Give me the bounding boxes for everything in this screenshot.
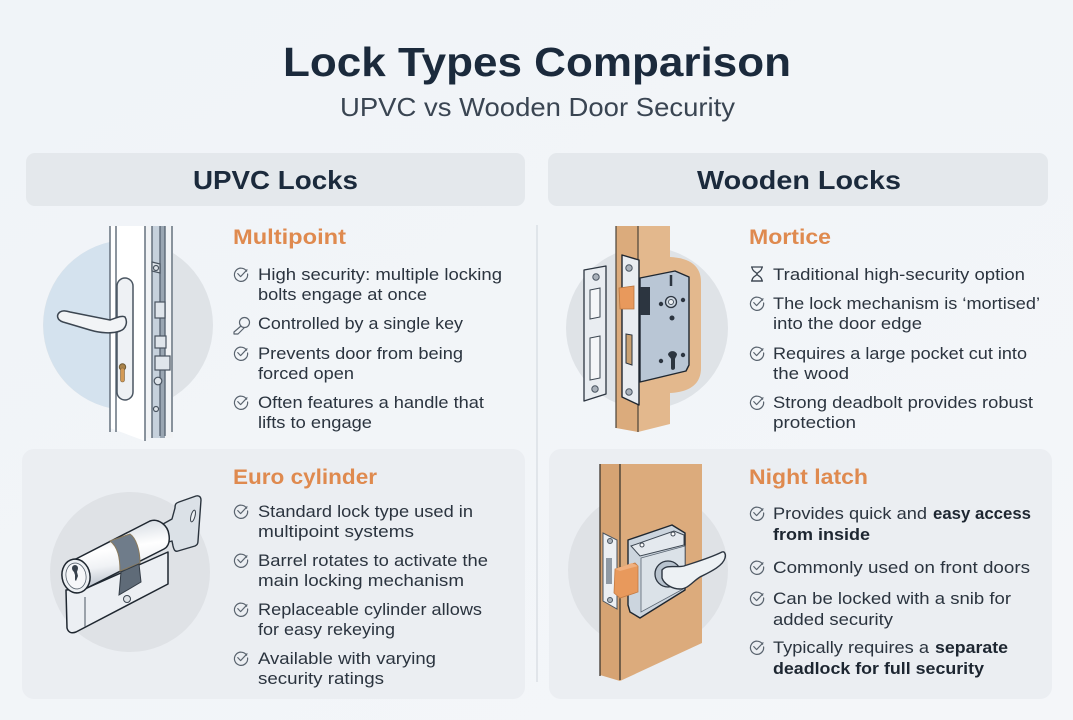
list: Night latch features: added security bbox=[773, 611, 894, 629]
illustration: night latch bbox=[568, 464, 728, 681]
list: Mortice features: Requires a large pocket cut into bbox=[773, 345, 1027, 363]
list: Multipoint features: Often features a handle that bbox=[258, 394, 484, 412]
heading: Multipoint: Multipoint bbox=[233, 226, 346, 249]
list: Night latch features: Provides quick and bbox=[773, 505, 927, 523]
list: Euro cylinder features bbox=[234, 503, 488, 688]
header: Wooden Locks: Wooden Locks bbox=[697, 165, 901, 195]
list: Night latch features: deadlock for full security bbox=[773, 660, 985, 678]
title: Lock Types Comparison bbox=[283, 39, 791, 85]
panel: Night latch bbox=[549, 449, 1052, 699]
list: Night latch features: Typically requires a bbox=[773, 639, 930, 657]
panel: Mortice bbox=[566, 226, 1040, 432]
list: Euro cylinder features: multipoint systems bbox=[258, 523, 414, 541]
list: Euro cylinder features: for easy rekeying bbox=[258, 621, 395, 639]
list: Multipoint features: bolts engage at once bbox=[258, 286, 427, 304]
heading: Night latch: Night latch bbox=[749, 466, 868, 489]
list: Euro cylinder features: Standard lock type used in bbox=[258, 503, 473, 521]
list: Mortice features: The lock mechanism is ‘mortised’ bbox=[773, 295, 1040, 313]
list: Euro cylinder features: Barrel rotates to activate the bbox=[258, 552, 488, 570]
list: Night latch features: separate bbox=[935, 639, 1008, 657]
heading: Euro cylinder: Euro cylinder bbox=[233, 466, 377, 489]
heading: Mortice: Mortice bbox=[749, 226, 831, 249]
list: Mortice features: the wood bbox=[773, 365, 849, 383]
panel: Multipoint bbox=[43, 226, 502, 441]
list: Night latch features bbox=[750, 505, 1031, 678]
panel: Euro cylinder bbox=[22, 449, 525, 699]
list: Multipoint features: High security: multiple locking bbox=[258, 266, 502, 284]
list: Mortice features: protection bbox=[773, 414, 856, 432]
list: Night latch features: from inside bbox=[773, 526, 870, 544]
list: Multipoint features: Prevents door from being bbox=[258, 345, 463, 363]
illustration: mortice lock bbox=[566, 226, 728, 432]
header: UPVC Locks bbox=[26, 153, 525, 206]
list: Night latch features: easy access bbox=[933, 505, 1031, 523]
list: Mortice features: Traditional high-security option bbox=[773, 266, 1025, 284]
list: Multipoint features: Controlled by a single key bbox=[258, 315, 464, 333]
illustration: multipoint door lock bbox=[43, 226, 213, 441]
list: Euro cylinder features: security ratings bbox=[258, 670, 384, 688]
icon: hourglass bbox=[751, 267, 763, 281]
list: Night latch features: Commonly used on front doors bbox=[773, 559, 1030, 577]
list: Mortice features: into the door edge bbox=[773, 315, 922, 333]
list: Multipoint features: forced open bbox=[258, 365, 354, 383]
list: Multipoint features bbox=[234, 266, 502, 432]
list: Euro cylinder features: Replaceable cylinder allows bbox=[258, 601, 482, 619]
list: Mortice features bbox=[750, 266, 1040, 432]
icon: key bbox=[234, 318, 250, 334]
subtitle: UPVC vs Wooden Door Security bbox=[340, 92, 735, 122]
list: Euro cylinder features: main locking mechanism bbox=[258, 572, 464, 590]
list: Multipoint features: lifts to engage bbox=[258, 414, 372, 432]
header: Wooden Locks bbox=[548, 153, 1048, 206]
list: Mortice features: Strong deadbolt provides robust bbox=[773, 394, 1033, 412]
list: Euro cylinder features: Available with varying bbox=[258, 650, 436, 668]
illustration: euro cylinder and key bbox=[50, 492, 210, 652]
header: UPVC Locks: UPVC Locks bbox=[193, 165, 358, 195]
list: Night latch features: Can be locked with a snib for bbox=[773, 590, 1012, 608]
